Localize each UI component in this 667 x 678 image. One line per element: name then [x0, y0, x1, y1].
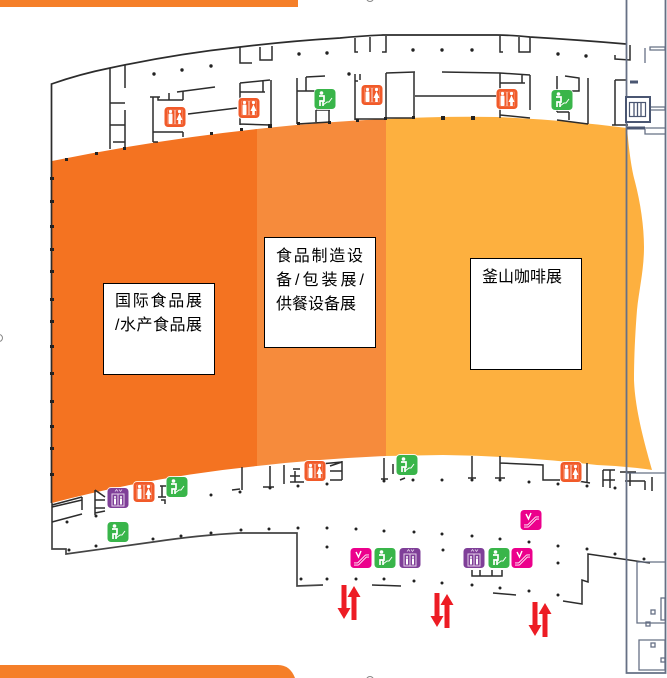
top orange header bar [0, 0, 298, 7]
label: international food and seafood: 国际食品展 [115, 292, 202, 310]
label: international food and seafood: /水产食品展 [115, 316, 202, 334]
grey elevator symbol [626, 82, 650, 128]
building walls [52, 35, 652, 604]
icon: elevator group 1 [399, 547, 421, 569]
label: Busan coffee: 釜山咖啡展 [482, 268, 562, 286]
arrows: entrance 2 [430, 593, 454, 628]
label: food manufacturing and packaging [264, 238, 376, 348]
icon: elevator group 2 [463, 547, 485, 569]
label: food manufacturing and packaging: 备/包装展/ [276, 271, 365, 289]
bottom orange header tab [0, 665, 295, 678]
icon: stairs group 1 [374, 547, 396, 569]
icon: restroom lower left [133, 481, 155, 503]
icon: elevator lower left [107, 487, 129, 509]
label: food manufacturing and packaging: 供餐设备展 [276, 295, 356, 313]
icon: stairs group 2 [488, 547, 510, 569]
icon: restroom top 3 [361, 84, 383, 106]
label: Busan coffee [470, 258, 582, 370]
icon: escalator group 2 [511, 547, 533, 569]
icon: stairs lower middle [396, 454, 418, 476]
structural columns [50, 48, 646, 597]
arrows: entrance 3 [528, 602, 552, 637]
icon: stairs far lower left [107, 521, 129, 543]
page edge markers [0, 0, 374, 678]
icon: stairs top 2 [551, 89, 573, 111]
icon: escalator upper right [520, 509, 542, 531]
icon: restroom top 2 [238, 97, 260, 119]
label: food manufacturing and packaging: 食品制造设 [276, 247, 363, 265]
zone: food manufacturing and packaging [257, 119, 386, 466]
arrows: entrance 1 [338, 585, 360, 620]
icon: restroom lower middle [304, 460, 326, 482]
icon: escalator group 1 [350, 547, 372, 569]
icon: restroom top 1 [164, 106, 186, 128]
icon: stairs top 1 [314, 88, 336, 110]
zone: Busan coffee [386, 117, 652, 470]
icon: stairs lower left [166, 476, 188, 498]
right building frame [626, 0, 666, 673]
label: international food and seafood [104, 284, 214, 374]
icon: restroom lower right [560, 461, 582, 483]
icon: restroom top 4 [496, 88, 518, 110]
zone: international food and seafood [52, 129, 257, 503]
